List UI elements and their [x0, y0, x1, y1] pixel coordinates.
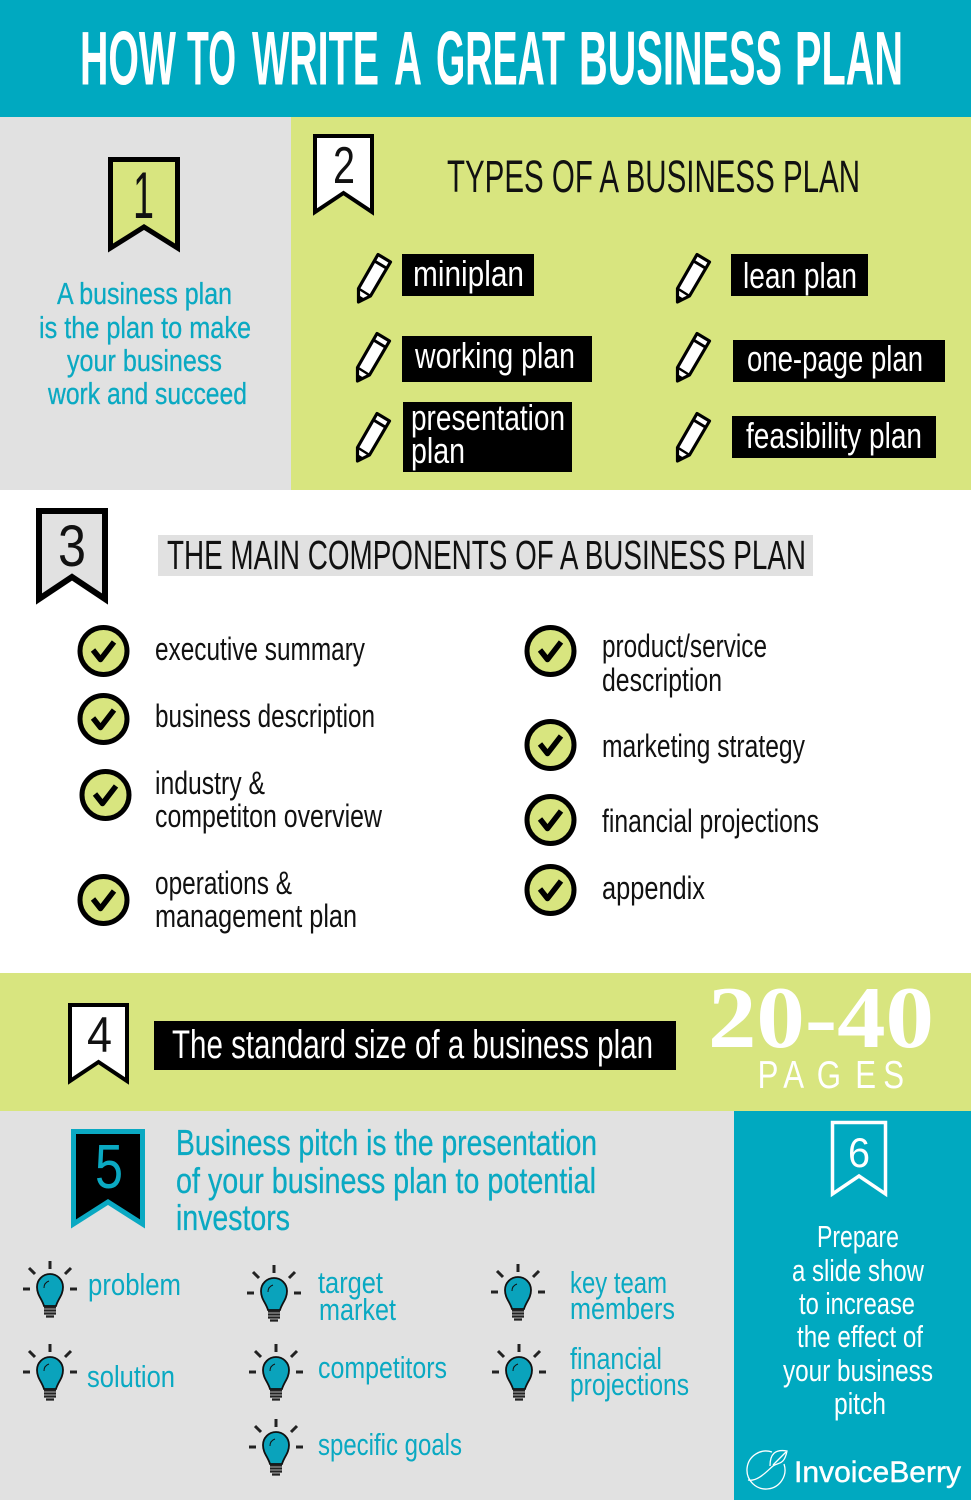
ribbon 1: 1 [133, 158, 154, 232]
component list: left [155, 631, 383, 934]
plan label: feasibility plan: feasibility plan [746, 415, 922, 456]
icon: light bulbs [23, 1261, 546, 1474]
pitch items: target [318, 1265, 383, 1300]
tip text: the effect of [797, 1319, 923, 1354]
title: HOW [80, 16, 176, 102]
pitch items: competitors [318, 1350, 447, 1385]
pitch definition [176, 1122, 597, 1238]
definition text: work and succeed [47, 376, 247, 411]
logo: InvoiceBerry: InvoiceBerry [794, 1456, 961, 1489]
pitch items: solution [87, 1359, 175, 1394]
plan label: presentation plan: presentation [411, 397, 565, 438]
plan label: presentation plan: plan [411, 430, 465, 471]
tip text: a slide show [792, 1253, 924, 1288]
component list: right: financial projections [602, 803, 819, 839]
title: A [394, 16, 422, 102]
pitch definition: of your business plan to potential [176, 1160, 596, 1201]
component list: left: operations & [155, 865, 292, 901]
title: GREAT [436, 16, 565, 102]
icon: pencils [358, 254, 710, 461]
component list: right: product/service [602, 628, 767, 664]
panel 3: main components [0, 490, 971, 973]
page count: 20-40 [708, 970, 934, 1067]
pitch definition: investors [176, 1197, 290, 1238]
pitch items: key team [570, 1265, 667, 1300]
ribbon 1 [110, 158, 178, 248]
definition text: your business [67, 343, 222, 378]
component list: left: competiton overview [155, 798, 383, 834]
tip text [783, 1219, 933, 1421]
ribbon 5 [74, 1132, 142, 1224]
panel 5: business pitch [0, 1111, 734, 1500]
standard size label [154, 1021, 676, 1070]
title: BUSINESS [579, 16, 782, 102]
plan label: one-page plan: one-page plan [747, 338, 923, 379]
pitch items: projections [570, 1367, 689, 1402]
ribbon 3 [39, 511, 105, 599]
component list: right [602, 628, 819, 906]
standard size label: The standard size of a business plan [172, 1023, 653, 1067]
panel 4: standard size [0, 970, 971, 1111]
ribbon 6: 6 [848, 1129, 870, 1176]
tip text: your business [783, 1353, 933, 1388]
pitch items: financial [570, 1341, 662, 1376]
tip text: Prepare [817, 1219, 899, 1254]
ribbon 6 [832, 1122, 886, 1194]
ribbon 2 [315, 136, 372, 212]
ribbon 3: 3 [58, 514, 86, 579]
ribbon 2: 2 [333, 137, 355, 195]
ribbon 4: 4 [87, 1007, 112, 1063]
tip text: pitch [834, 1386, 886, 1421]
component list: left: business description [155, 698, 375, 734]
panel 2: types of plan [291, 117, 971, 490]
title: WRITE [252, 16, 379, 102]
component list: left: executive summary [155, 631, 365, 667]
tip text: to increase [799, 1286, 915, 1321]
plan label: miniplan: miniplan [413, 253, 524, 294]
panel 6: slide show tip [734, 1111, 971, 1500]
pitch items: specific goals [318, 1427, 462, 1462]
plan label: working plan: working plan [414, 335, 575, 376]
page count: PAGES [758, 1054, 904, 1097]
component list: left: industry & [155, 765, 265, 801]
title: TO [187, 16, 236, 102]
component list: right: appendix [602, 870, 705, 906]
ribbon 5: 5 [95, 1133, 123, 1202]
pitch items: members [570, 1291, 675, 1326]
header banner [0, 0, 971, 117]
plan label: presentation plan [403, 397, 572, 472]
page count [708, 970, 934, 1097]
panel 1: definition [0, 117, 291, 490]
definition text [39, 276, 251, 411]
pitch items: market [319, 1292, 396, 1327]
pitch items [87, 1265, 689, 1462]
pitch definition: Business pitch is the presentation [176, 1122, 597, 1163]
pitch items: problem [88, 1267, 181, 1302]
component list: left: management plan [155, 898, 357, 934]
logo: InvoiceBerry [747, 1451, 961, 1489]
plan label: lean plan: lean plan [743, 255, 857, 296]
component list: right: marketing strategy [602, 728, 805, 764]
component list: right: description [602, 662, 722, 698]
icon: check marks [80, 628, 574, 924]
definition text: is the plan to make [39, 310, 251, 345]
title [80, 16, 903, 102]
ribbon 4 [70, 1005, 127, 1081]
definition text: A business plan [57, 276, 232, 311]
